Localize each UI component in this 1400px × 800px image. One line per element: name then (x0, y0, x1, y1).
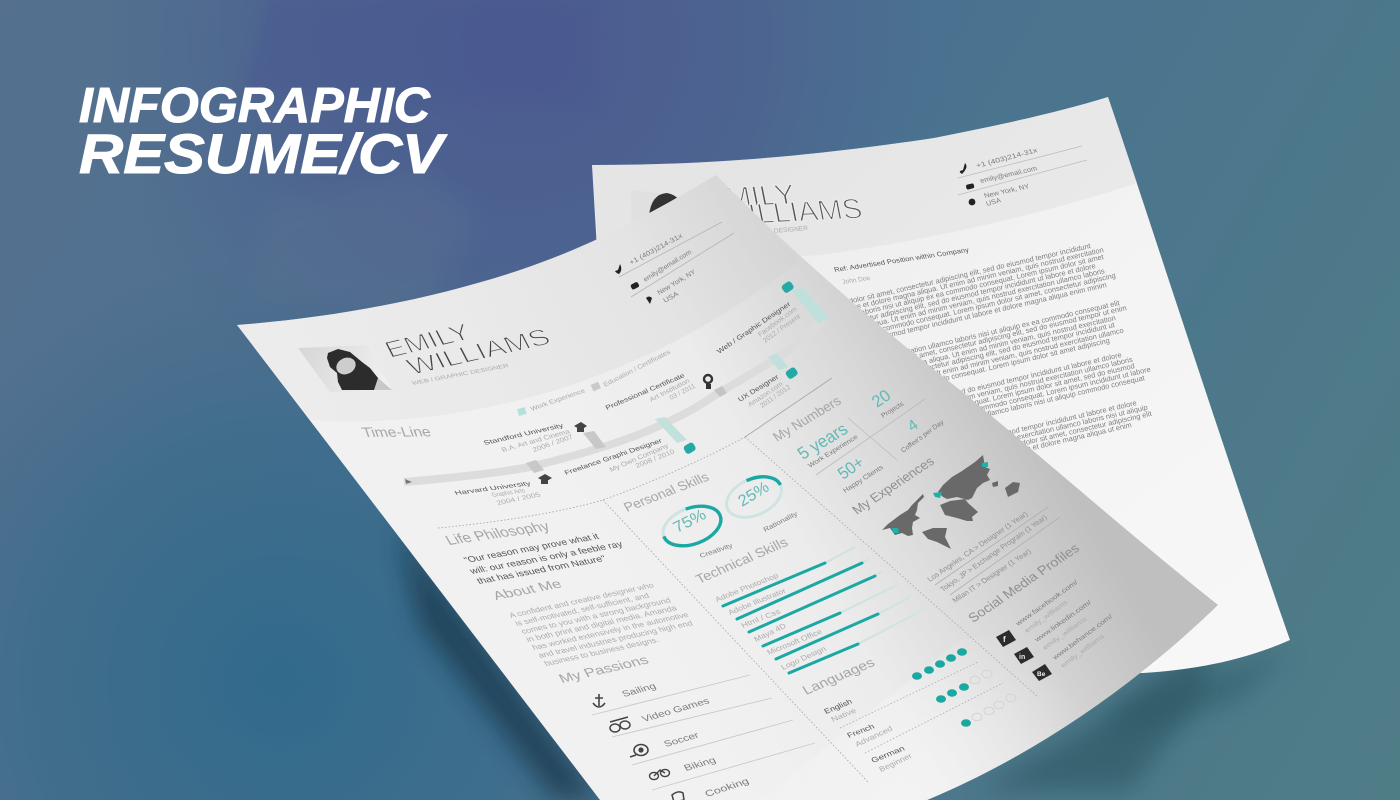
panel: social media profiles: emily_williams (1059, 632, 1106, 669)
name: WEB / GRAPHIC DESIGNER (411, 363, 511, 387)
panel: languages: Beginner (878, 752, 914, 774)
name: WILLIAMS (402, 323, 555, 380)
icon: cooking hat (672, 792, 684, 800)
letter text: consectetur adipiscing elit, sed do eiusmod tempor incididunt ut labore et dolore (840, 261, 1096, 329)
panel: social media profiles: emily_williams (1041, 615, 1089, 651)
panel: my experiences: Tokyo, JP > Exchange Program (1 Year) (939, 513, 1049, 593)
timeline entries: UX Designer (736, 372, 781, 403)
contact details: emily@email.com (642, 248, 693, 284)
panel: my numbers: My Numbers (771, 394, 844, 445)
letter text: ut labore et dolore magna aliqua. Ut enim ad minim veniam, quis nostrud exercitation (844, 313, 1116, 384)
panel: personal skills: 75% (670, 505, 709, 536)
panel: personal skills: Creativity (698, 541, 734, 560)
letter text: elit, sed do eiusmod tempor incididunt ut labore et dolore magna aliqua enim minim (840, 280, 1107, 350)
timeline entries: 2012 / Present (761, 312, 802, 344)
panel: about me: has worked extensively in the automotive (530, 610, 690, 652)
back photo (631, 190, 684, 240)
contact details: New York, NY (656, 268, 697, 297)
panel: my passions (557, 654, 815, 800)
back contact details: New York, NY (983, 182, 1031, 200)
letter text: sed do eiusmod tempor incididunt ut labore et dolore magna aliqua ut enim (892, 420, 1132, 484)
timeline entries: 2011 / 2012 (758, 383, 792, 409)
panel: technical skills: Adobe Photoshop (714, 571, 780, 604)
icon: bicycle (650, 769, 670, 780)
panel: my numbers: 4 (904, 416, 922, 435)
panel: social media profiles: www.facebook.com/ (1013, 578, 1080, 628)
contact details: USA (662, 290, 680, 305)
panel: my passions: My Passions (557, 654, 652, 686)
panel: about me: and travel industries producing high end (536, 619, 694, 660)
chart: rationality 25% ring (720, 469, 788, 525)
icon: certificate ribbon (704, 375, 712, 389)
icon: mail (966, 183, 975, 190)
icon: behance: Be (1037, 671, 1046, 678)
back sheet: cover letter (592, 97, 1290, 673)
panel: my passions: Soccer (662, 731, 702, 749)
panel: my passions: Video Games (640, 697, 712, 724)
icon: soccer ball (630, 744, 648, 757)
panel: personal skills: 25% (735, 477, 772, 510)
panel: my numbers: 50+ (834, 452, 867, 483)
letter text: ut labore et dolore magna aliqua. Ut enim ad minim veniam, quis nostrud exercitation (832, 245, 1104, 316)
panel: life philosophy: "Our reason may prove what it (462, 532, 601, 565)
panel: social media profiles: www.behance.com/ (1050, 612, 1115, 662)
panel: languages: Native (830, 706, 858, 724)
panel: technical skills: Html / Css (740, 608, 782, 630)
icon: pin (969, 199, 975, 205)
contact details (615, 222, 734, 305)
panel: languages: German (870, 744, 907, 765)
timeline entries: Graphic Arts (490, 487, 527, 499)
icon: behance (1032, 664, 1052, 681)
timeline entries: Amazon.com (746, 380, 784, 408)
icon: facebook (996, 630, 1016, 647)
title: INFOGRAPHIC (79, 79, 431, 133)
panel: my numbers: Happy Clients (841, 463, 885, 494)
back contact details (958, 146, 1087, 208)
letter text: Ref: Advertised Position within Company (833, 246, 970, 274)
panel: my passions: Cooking (703, 777, 751, 799)
icons: graduation caps (538, 422, 587, 484)
panel: technical skills: Technical Skills (694, 536, 791, 587)
legend: Work Experience (529, 387, 587, 413)
panel: personal skills: Personal Skills (622, 471, 712, 515)
letter text: ullamco laboris. consectetur adipiscing elit, sed do eiusmod tempor incididunt ut (859, 320, 1115, 388)
letter text: ex ea commodo consequat. Lorem ipsum dolor sit amet, consectetur adipiscing elit (887, 409, 1152, 479)
timeline entries: My Own Company (608, 441, 670, 474)
shadow of sheets on the ground (395, 525, 1290, 800)
panel: life philosophy (442, 518, 626, 586)
panel: languages: French (846, 722, 877, 740)
panel: personal skills (622, 469, 799, 560)
map pins (892, 462, 988, 533)
panel: life philosophy: will: our reason is only a feeble ray (467, 540, 626, 577)
icon: game controller (610, 717, 630, 732)
panel: my numbers (771, 386, 945, 494)
rating dots (912, 648, 1016, 727)
timeline entries: Freelance Graphi Designer (563, 436, 664, 477)
legend: Education / Certificates (602, 347, 672, 389)
letter text: ullamco laboris nisi ut aliquip ex ea commodo consequat. Lorem ipsum dolor sit amet (831, 252, 1104, 324)
letter text: quis nostrud exercitation ullamco laboris nisi ut aliquip ex ea commodo consequat elit (847, 298, 1120, 370)
panel: my experiences: My Experiences (850, 455, 938, 518)
letter text: veniam, quis nostrud exercitation ullamco laboris nisi ut aliquip commodo consequat (876, 373, 1145, 444)
timeline entries: B.A. Art and Cinema (500, 427, 572, 454)
back name: / GRAPHIC DESIGNER (739, 225, 808, 238)
icon: linkedin (1014, 647, 1034, 664)
letter text: magna aliqua. Ut enim ad minim veniam, quis nostrud exercitation ullamco laboris (843, 266, 1106, 335)
panel: languages: Advanced (854, 724, 895, 749)
panel: languages (800, 648, 1016, 774)
panel: my numbers: 20 (868, 386, 894, 411)
letter text: dolore magna aliqua. Ut enim ad minim veniam, quis nostrud exercitation ullamco (863, 326, 1124, 394)
back name: WILLIAMS (718, 192, 865, 231)
icon: phone (960, 163, 966, 174)
bar chart: skills levels (723, 563, 878, 673)
panel: my numbers: 5 years (794, 419, 852, 464)
panel: personal skills: Rationality (762, 509, 799, 534)
panel: about me: comes to you with a strong background (519, 596, 673, 636)
panel: my numbers: Work Experience (806, 433, 859, 469)
panel: life philosophy: Life Philosophy (442, 518, 553, 548)
timeline entries: 2008 / 2010 (634, 447, 676, 470)
back contact details: USA (985, 196, 1002, 208)
letter text: magna aliqua. Ut enim ad minim veniam, quis nostrud exercitation ullamco laboris (871, 355, 1134, 424)
timeline track (404, 280, 829, 484)
panel: social media profiles: Social Media Profiles (966, 542, 1083, 626)
timeline entries: Harvard University (453, 479, 533, 497)
letter text: Ut enim ad minim veniam, quis nostrud exercitation ullamco laboris nisi ut aliquip (889, 403, 1148, 471)
timeline entries: Web / Graphic Designer (715, 300, 793, 355)
letter text: John Doe (841, 274, 871, 286)
panel: my experiences: Milan IT > Designer (1 Year) (951, 547, 1033, 604)
back name: EMILY (702, 178, 798, 214)
timeline entries: 03 / 2011 (668, 382, 697, 402)
timeline entries: 2006 / 2007 (531, 433, 575, 454)
panel: social media profiles (966, 542, 1115, 681)
panel: about me (491, 578, 694, 668)
panel: technical skills: Maya 4D (753, 622, 788, 644)
panel: about me: in both print and digital media. Amanda (524, 604, 679, 644)
legend (517, 347, 672, 416)
letter text: consectetur adipiscing elit, sed do eiusmod tempor incididunt ut labore et dolore (881, 398, 1137, 466)
panel: social media profiles: www.linkedin.com/ (1032, 598, 1094, 644)
panel: languages: Languages (800, 656, 878, 698)
panel: about me: A confident and creative designer who (507, 581, 656, 620)
panel: about me: is self-motivated, self-sufficient, and (513, 591, 651, 628)
icon: pin (646, 296, 652, 304)
icons: work briefcases (683, 280, 799, 455)
heading: time-line: Time-Line (360, 425, 433, 441)
back contact details: emily@email.com (979, 164, 1038, 185)
timeline entries: 2004 / 2005 (495, 491, 542, 507)
panel: languages: English (823, 698, 854, 716)
panel: my numbers: Coffee's per Day (899, 418, 945, 454)
panel: technical skills: Logo Design (780, 645, 828, 672)
panel: social media profiles: emily_williams (1023, 598, 1070, 634)
title: RESUME/CV (79, 122, 448, 185)
timeline entries (453, 300, 802, 507)
bar chart: skills tracks (825, 547, 923, 644)
panel: technical skills (694, 536, 923, 673)
timeline entries: Art Institution (648, 376, 691, 404)
letter text: Lorem ipsum dolor sit amet, consectetur adipiscing elit, sed do eiusmod tempor incididunt (804, 241, 1091, 316)
icon: phone (615, 264, 621, 274)
panel: life philosophy: that has issued from Nature" (475, 554, 609, 586)
panel: my experiences (850, 455, 1060, 604)
panel: technical skills: Microsoft Office (766, 628, 824, 657)
title (79, 79, 448, 185)
panel: my numbers: Projects (879, 400, 906, 419)
letter text: ut aliquip ex ea commodo consequat. Lorem ipsum dolor sit amet, consectetur adipiscing (831, 271, 1116, 345)
world map (882, 455, 1020, 549)
back name (702, 178, 865, 238)
name: EMILY (380, 318, 475, 363)
chart: creativity 75% ring (658, 499, 726, 553)
panel: my passions: Biking (682, 756, 718, 773)
letter text: nisi ut aliquip ex ea commodo consequat. Lorem ipsum dolor sit amet adipiscing (853, 336, 1110, 403)
icon: facebook: f (1003, 635, 1006, 644)
back contact details: +1 (403)214-31x (975, 146, 1039, 170)
contact details: +1 (403)214-31x (628, 231, 684, 267)
timeline entries: Professional Certificate (604, 371, 686, 412)
front sheet: resume (237, 175, 1218, 800)
panel: about me: About Me (491, 578, 565, 603)
letter text (804, 241, 1152, 484)
photo (298, 345, 392, 392)
icon: linkedin: in (1019, 654, 1025, 661)
letter text: consectetur adipiscing elit, sed do eiusmod tempor incididunt ut labore et dolore (866, 350, 1122, 418)
panel: technical skills: Adobe Illustrator (727, 587, 788, 617)
timeline markers (526, 288, 829, 473)
back sheet header band (592, 97, 1137, 270)
letter text: ut aliquip ex ea commodo consequat. Lorem ipsum dolor sit amet, sed do eiusmod (870, 361, 1135, 431)
panel: my experiences: Los Angeles, CA > Designer (1 Year) (926, 510, 1030, 583)
letter text: sed do eiusmod tempor. commodo consequat. Lorem ipsum incididunt ut labore (896, 365, 1151, 432)
panel: about me: business to business designs. (542, 635, 660, 668)
panel: my passions: Sailing (620, 682, 658, 699)
icon: anchor (593, 694, 605, 707)
timeline entries: Standford University (482, 421, 565, 447)
timeline entries: Facebook.com (756, 305, 798, 338)
icon: mail (630, 281, 640, 290)
letter text: Lorem ipsum dolor sit amet, consectetur adipiscing elit, sed do eiusmod tempor ut enim (847, 303, 1127, 376)
